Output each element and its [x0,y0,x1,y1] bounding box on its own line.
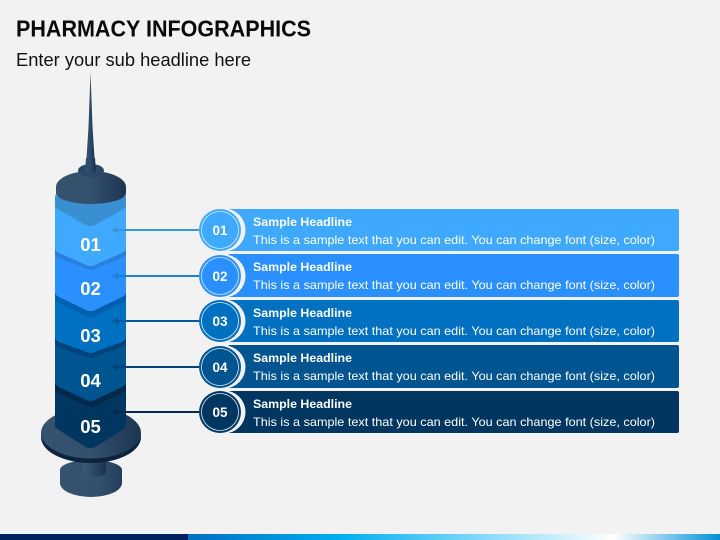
text 03: This is a sample text that you can edit. You can change font (size, color) [253,324,655,338]
text 01: Sample Headline [253,215,352,229]
subtitle: Enter your sub headline here [16,50,251,70]
barrel segment 05 [55,375,126,448]
bar 04 [228,345,679,388]
needle hub [78,164,104,177]
needle [86,72,95,166]
text 01 [253,215,655,247]
plunger stem [83,450,106,477]
number badge 05: 05 [212,405,228,420]
text 05: Sample Headline [253,397,352,411]
number badge 03 [199,300,246,342]
row 03 [199,300,679,342]
connector 05 [111,408,199,416]
barrel segment 04: 04 [80,370,101,391]
connector 03 [111,318,199,324]
barrel top cap [56,171,126,204]
barrel segment 02: 02 [80,278,101,299]
syringe illustration [41,72,141,497]
bar 03 [228,300,679,342]
connector 02 [111,272,199,280]
number badge 01 [199,208,246,252]
row 04 [199,345,679,388]
text 04 [253,351,655,383]
text 03 [253,306,655,338]
barrel segment 03: 03 [80,325,101,346]
number badge 03: 03 [212,314,228,329]
needle base [85,158,96,172]
barrel segment 04 [55,335,126,407]
text 02 [253,260,655,292]
title: PHARMACY INFOGRAPHICS [16,16,311,42]
row 02 [199,254,679,298]
text 05: This is a sample text that you can edit. You can change font (size, color) [253,415,655,429]
chevron shadow [55,197,126,226]
bar 05 [228,391,679,433]
number badge 02 [199,254,246,298]
barrel segment 02 [55,245,126,317]
row 05 [199,390,679,434]
connector 04 [111,364,199,370]
number badge 04: 04 [212,360,228,375]
number badge 05 [199,390,246,434]
barrel segment 01: 01 [80,234,101,255]
text 02: This is a sample text that you can edit. You can change font (size, color) [253,278,655,292]
plunger flange [41,408,141,463]
text 04: This is a sample text that you can edit. You can change font (size, color) [253,369,655,383]
number badge 04 [199,346,246,388]
bar 01 [228,209,679,251]
connector 01 [111,226,199,234]
footer strip [0,534,720,540]
text 03: Sample Headline [253,306,352,320]
text 02: Sample Headline [253,260,352,274]
text 01: This is a sample text that you can edit. You can change font (size, color) [253,233,655,247]
number badge 02: 02 [212,269,228,284]
row 01 [199,208,679,252]
barrel segment 03 [55,290,126,358]
plunger foot disc [60,460,122,497]
barrel segment 05: 05 [80,416,101,437]
barrel segment 01 [55,195,126,270]
bar 02 [228,254,679,297]
number badge 01: 01 [212,223,228,238]
text 04: Sample Headline [253,351,352,365]
text 05 [253,397,655,429]
